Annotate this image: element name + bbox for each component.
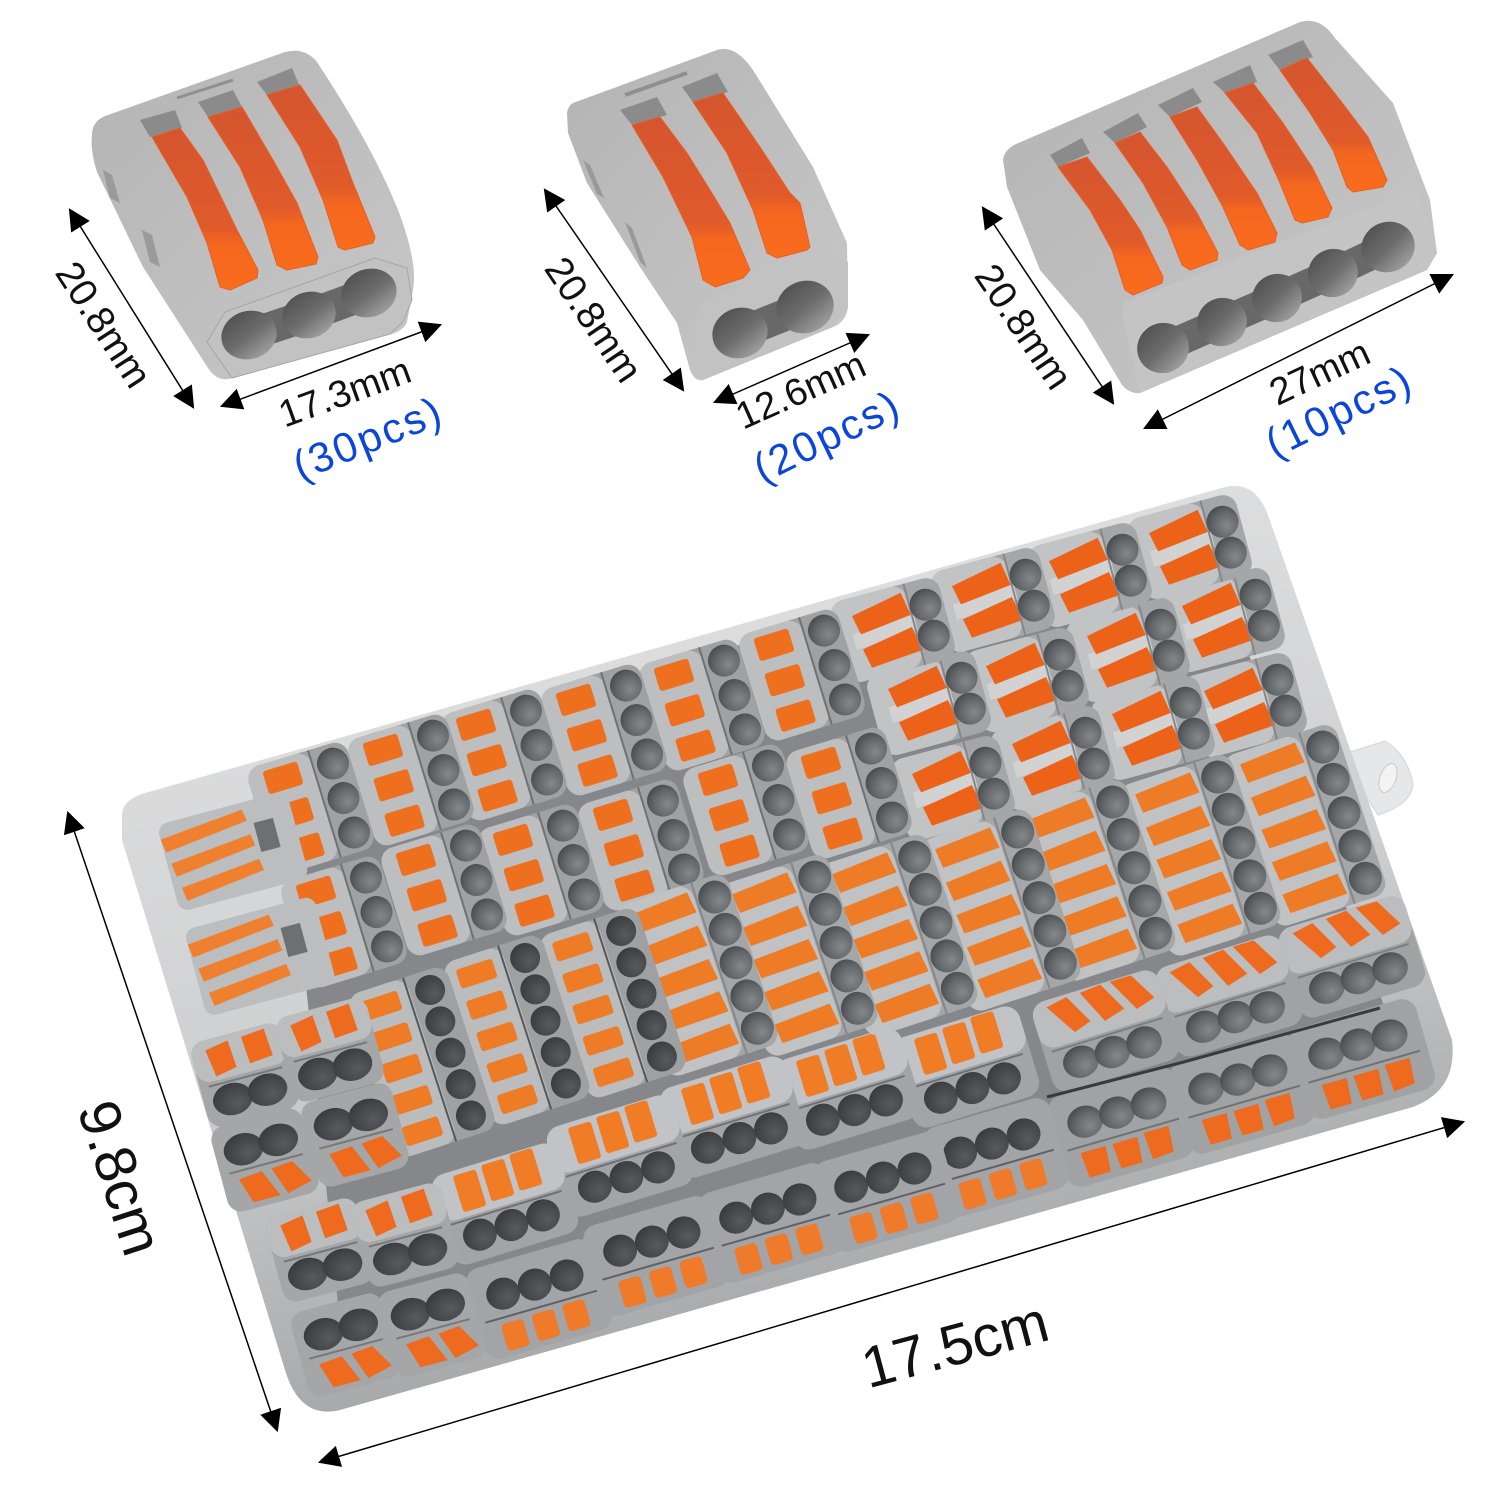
dimension: 3-pole: 17.3mm — [273, 350, 417, 436]
dimension: tray size: 9.8cm — [65, 1093, 175, 1263]
dimension: 3-pole: 20.8mm — [47, 254, 159, 396]
dimension: 3-pole: (30pcs) — [286, 387, 450, 489]
connectors in tray: 2-pole top rows — [828, 492, 1310, 843]
connectors in tray: 3-pole upper rows — [245, 606, 915, 991]
dimension: 2-pole — [536, 190, 908, 492]
connectors in tray: 3-pole levers-down row — [463, 996, 1438, 1362]
dimension: tray size — [65, 813, 1463, 1462]
dimension: 2-pole: 12.6mm — [730, 344, 872, 438]
transparent tray — [122, 486, 1453, 1412]
dimension: 3-pole — [47, 210, 450, 489]
connector photo: 2-pole — [567, 49, 848, 380]
connector photo: 3-pole — [92, 51, 414, 379]
seam shadow between lower rows — [1047, 1008, 1380, 1097]
connectors in tray: left 2-pole cluster — [188, 995, 489, 1400]
dimension: 2-pole: (20pcs) — [746, 380, 908, 492]
connectors in tray: left side-on 3-pole pair — [157, 790, 337, 1017]
connector photo: 5-pole — [1003, 21, 1437, 393]
tray mounting tab — [1350, 741, 1413, 815]
dimension: 5-pole: 27mm — [1263, 332, 1377, 414]
connectors in tray: 3-pole levers-up row — [428, 893, 1429, 1268]
dimension: 5-pole — [966, 208, 1452, 467]
dimension: tray size: 17.5cm — [855, 1289, 1055, 1401]
connectors in tray: 5-pole row — [346, 721, 1389, 1160]
dimension: 2-pole: 20.8mm — [536, 250, 650, 390]
dimension: 5-pole: (10pcs) — [1258, 355, 1420, 467]
dimension: 5-pole: 20.8mm — [966, 257, 1080, 397]
